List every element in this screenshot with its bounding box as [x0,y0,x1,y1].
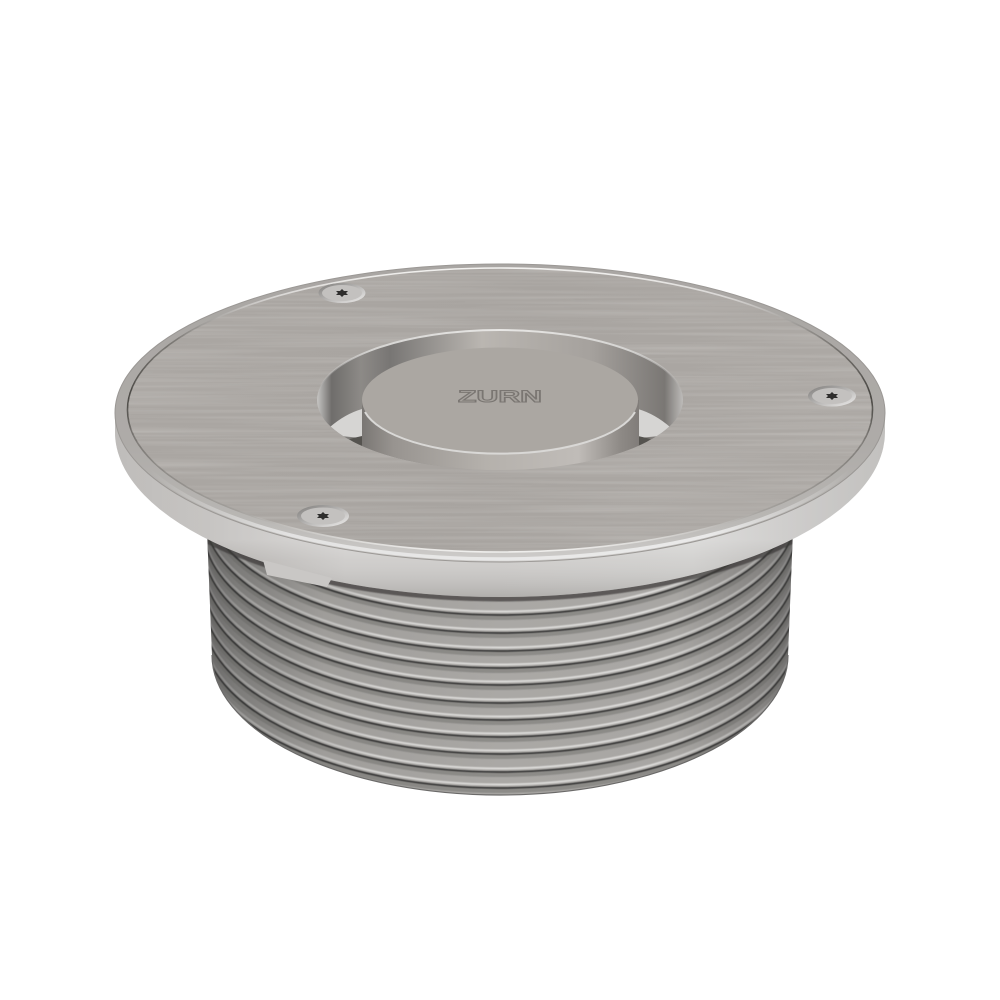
thread 7 [210,602,790,726]
rim side wall [115,264,885,597]
cap edge highlight [365,412,635,454]
threaded body [207,539,793,796]
thread 5 [208,562,792,690]
thread 9 [211,640,788,760]
cap side wall [362,400,639,469]
right opening [638,409,670,438]
rim cast shadow [207,541,793,599]
thread 3 [208,539,793,656]
rim locating tab [263,560,332,587]
thread 1 [292,562,736,620]
thread 6 [209,584,791,708]
thread 10 [213,662,787,778]
recess top highlight [317,330,683,400]
thread 11 [226,698,774,794]
centre cap [362,348,638,454]
thread 4 [208,546,792,674]
rim top bevel [115,264,885,562]
screw: right [808,386,856,406]
thread 2 [225,548,776,638]
thread 8 [210,622,790,742]
screw: top left [318,283,366,303]
left opening [330,409,362,438]
centre recess [317,330,683,480]
dark slot left [349,436,362,446]
plate top face [127,268,873,552]
logo: ZURN: ZURN [458,387,542,406]
screw: bottom left [297,505,349,527]
recess inner wall [317,330,683,470]
rim front highlight [121,415,879,559]
product illustration: threaded round drain cover [114,264,886,796]
dark slot right [638,436,651,446]
flange rim [115,264,885,597]
